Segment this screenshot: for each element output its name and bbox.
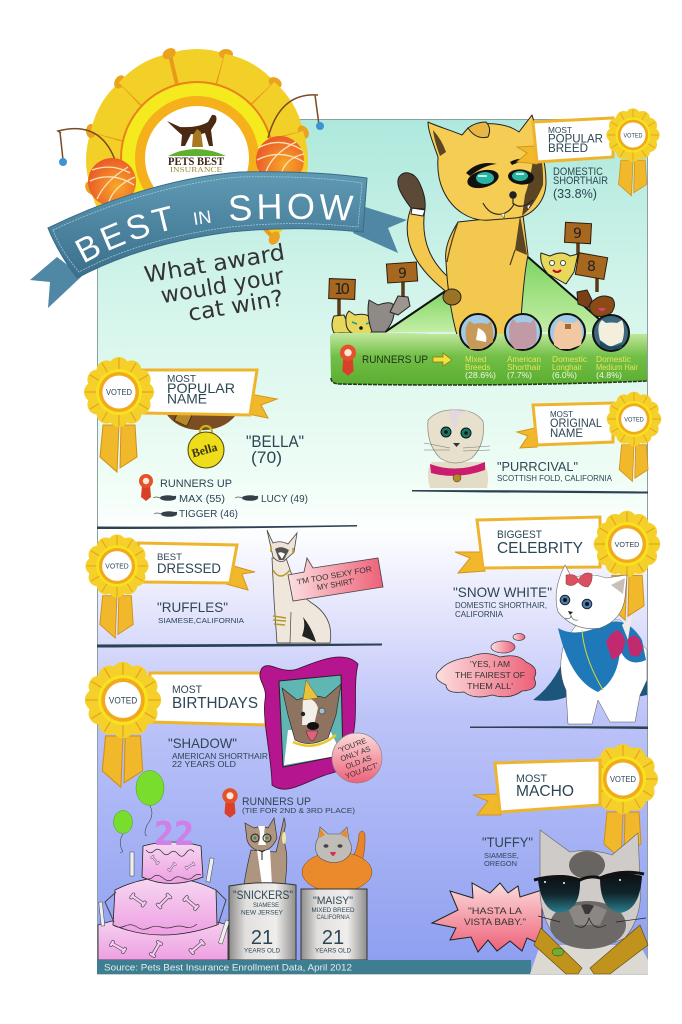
green hills [385, 257, 604, 332]
panel: most macho [432, 744, 658, 974]
name: snow white: DOMESTIC SHORTHAIR, [455, 601, 547, 610]
name: purrcival: SCOTTISH FOLD, CALIFORNIA [497, 474, 613, 483]
award banner: most popular name: POPULAR [167, 380, 235, 396]
siamese cat [267, 530, 383, 643]
snow white cat [533, 565, 647, 724]
thought bubble [436, 634, 536, 697]
collar and tag [165, 408, 238, 468]
speech bubble: 'I'M TOO SEXY FOR [296, 565, 373, 587]
panel: most birthdays [85, 657, 382, 960]
award banner: most original name: MOST [550, 409, 573, 419]
title ribbon: IN [194, 210, 211, 225]
speech bubble: MY SHIRT' [316, 577, 356, 592]
maisy pedestal: YEARS OLD [315, 948, 351, 954]
award banner: most original name [517, 403, 613, 448]
logo: dog and cat: INSURANCE [170, 165, 223, 174]
tuffy cat [530, 830, 648, 974]
title text [80, 219, 356, 266]
award banner: most original name: ORIGINAL [550, 416, 602, 430]
panel: most popular name [84, 357, 308, 520]
award banner: best dressed: BEST [157, 552, 182, 563]
name: shadow [168, 735, 268, 769]
speech circle: 'YOU'RE [337, 736, 368, 755]
snickers cat [244, 818, 287, 885]
green runners up banner [330, 333, 647, 385]
award banner: most original name: NAME [550, 426, 583, 440]
award banner: most macho [473, 760, 600, 815]
award banner: best dressed: DRESSED [157, 560, 221, 576]
award banner: best dressed [138, 543, 255, 590]
name: snow white: CALIFORNIA [455, 610, 504, 619]
breed labels: (6.0%) [552, 371, 577, 380]
breed labels: Medium Hair [596, 363, 638, 372]
judges with score signs: 9 [573, 226, 582, 242]
logo sunburst rosette [83, 46, 311, 247]
thought bubble: THEM ALL' [467, 682, 514, 691]
maisy pedestal: MIXED BREED [312, 907, 355, 914]
question heading [142, 240, 294, 333]
starburst speech bubble [432, 883, 542, 952]
breed labels: American [507, 355, 541, 364]
runners up list: TIGGER (46) [179, 509, 238, 520]
judges with score signs [329, 222, 614, 335]
runners up list: RUNNERS UP [160, 478, 232, 490]
title ribbon: SHOW [230, 194, 354, 221]
breed labels: Domestic [552, 355, 587, 364]
award banner: most popular name: MOST [167, 374, 196, 385]
snickers pedestal: 21 [251, 927, 273, 949]
result text: domestic shorthair: SHORTHAIR [553, 175, 608, 187]
voted rosette: VOTED [105, 562, 129, 571]
breed labels: (28.6%) [465, 371, 496, 380]
logo: dog and cat: PETS BEST [168, 156, 224, 168]
breed labels: (4.8%) [596, 371, 622, 380]
maisy pedestal [301, 889, 367, 960]
award banner: most popular name: NAME [167, 390, 207, 406]
balloons [114, 770, 164, 853]
face of big cat [465, 159, 535, 218]
runners up heading [222, 788, 356, 818]
breed labels: Breeds [465, 363, 490, 372]
voted rosette [594, 511, 660, 620]
tail [398, 173, 458, 296]
name: shadow: "SHADOW" [168, 735, 237, 751]
name: bella: (70) [251, 448, 282, 467]
result text: domestic shorthair: (33.8%) [553, 186, 597, 201]
starburst speech bubble: "HASTA LA [468, 906, 523, 917]
voted rosette: VOTED [106, 388, 132, 397]
award banner: most macho: MOST [516, 773, 547, 785]
name: ruffles: SIAMESE,CALIFORNIA [158, 616, 244, 625]
runners up list: MAX (55) [179, 494, 225, 505]
award banner: most popular breed: BREED [548, 141, 588, 155]
birthday cake [98, 814, 230, 960]
snickers pedestal: SIAMESE [253, 902, 280, 909]
voted rosette [588, 744, 658, 859]
number 22 on cake: 22 [154, 814, 194, 853]
breed labels: (7.7%) [507, 371, 532, 380]
runners up list [139, 474, 308, 520]
award banner: most popular breed: POPULAR [548, 132, 603, 146]
judges with score signs: 8 [587, 259, 596, 275]
voted rosette [86, 534, 148, 638]
name: tuffy: SIAMESE, [484, 851, 519, 860]
voted rosette: VOTED [624, 132, 643, 139]
name: ruffles: "RUFFLES" [157, 599, 228, 615]
thought bubble: THE FAIREST OF [455, 671, 525, 680]
name: bella: "BELLA" [246, 432, 304, 451]
big yellow cat [428, 115, 546, 335]
voted rosette [606, 108, 660, 196]
name: snow white [453, 584, 552, 619]
title ribbon: BEST [74, 206, 170, 262]
breed labels: Longhair [552, 363, 582, 372]
title ribbon [30, 171, 407, 308]
name: tuffy: "TUFFY" [482, 834, 533, 850]
name: tuffy: OREGON [484, 859, 517, 868]
panel: most original name [424, 392, 661, 488]
award banner: most popular breed [517, 118, 613, 164]
maisy pedestal: CALIFORNIA [316, 914, 350, 921]
speech circle: ONLY AS [339, 744, 372, 763]
voted rosette [607, 392, 661, 481]
question heading: What award [142, 240, 287, 289]
award banner: biggest celebrity: BIGGEST [497, 529, 542, 541]
logo: dog and cat [167, 115, 226, 174]
award banner: most birthdays [150, 673, 275, 730]
green runners up banner: RUNNERS UP [362, 354, 428, 366]
yarn ball right [256, 95, 324, 184]
name: ruffles [157, 599, 244, 625]
question heading: cat win? [186, 285, 285, 327]
award banner: biggest celebrity: CELEBRITY [497, 540, 583, 557]
speech bubble [288, 558, 383, 601]
yarn ball left [58, 129, 136, 206]
question heading: would your [159, 263, 286, 309]
starburst speech bubble: VISTA BABY." [464, 917, 526, 928]
award banner: most macho: MACHO [516, 783, 574, 800]
result text: domestic shorthair: DOMESTIC [553, 166, 603, 178]
name: shadow: AMERICAN SHORTHAIR [172, 752, 268, 761]
name: bella [246, 432, 304, 467]
maisy cat [302, 827, 372, 892]
snickers pedestal: YEARS OLD [244, 948, 280, 954]
snickers pedestal [229, 883, 296, 960]
maisy pedestal: 21 [322, 927, 344, 949]
name: purrcival [497, 459, 613, 483]
award banner: most popular breed: MOST [548, 125, 572, 135]
result text: domestic shorthair [553, 166, 608, 201]
snickers pedestal: NEW JERSEY [241, 910, 284, 916]
background panel [98, 120, 648, 974]
judges with score signs: 9 [398, 266, 407, 282]
name: shadow: 22 YEARS OLD [172, 760, 236, 769]
runners up heading: (TIE FOR 2ND & 3RD PLACE) [242, 806, 356, 815]
voted rosette [85, 662, 161, 787]
paw [443, 289, 461, 305]
speech circle [332, 733, 382, 783]
breed labels: Mixed [465, 355, 486, 364]
breed labels: Domestic [596, 355, 631, 364]
breed labels [465, 355, 638, 380]
source bar: Source: Pets Best Insurance Enrollment Data, April 2012 [104, 962, 352, 974]
name: purrcival: "PURRCIVAL" [497, 459, 578, 474]
speech circle: YOU ACT' [344, 760, 380, 781]
panel: best dressed [86, 530, 383, 643]
collar and tag: Bella [190, 440, 219, 460]
panel: biggest celebrity [436, 511, 660, 724]
breed labels: Shorthair [507, 363, 541, 372]
framed dog portrait [260, 657, 382, 789]
maisy pedestal: "MAISY" [313, 895, 353, 907]
thought bubble: 'YES, I AM [470, 660, 510, 669]
voted rosette: VOTED [610, 775, 636, 784]
name: tuffy [482, 834, 533, 868]
panel: most popular breed [329, 108, 660, 385]
runners up heading: RUNNERS UP [242, 796, 311, 808]
award banner: most birthdays: MOST [172, 684, 202, 696]
voted rosette: VOTED [615, 540, 640, 549]
voted rosette [84, 357, 154, 472]
scottish fold cat [424, 410, 490, 488]
speech circle: OLD AS [344, 753, 373, 771]
voted rosette: VOTED [624, 416, 644, 423]
runners up list: LUCY (49) [261, 494, 308, 505]
award banner: most popular name [142, 370, 277, 418]
name: snow white: "SNOW WHITE" [453, 584, 552, 600]
snickers pedestal: "SNICKERS" [233, 888, 293, 902]
judges with score signs: 10 [334, 280, 350, 298]
voted rosette: VOTED [109, 695, 137, 705]
award banner: most birthdays: BIRTHDAYS [172, 695, 258, 712]
runner-up portraits [460, 314, 629, 351]
award banner: biggest celebrity [455, 517, 600, 573]
source bar [97, 960, 531, 974]
